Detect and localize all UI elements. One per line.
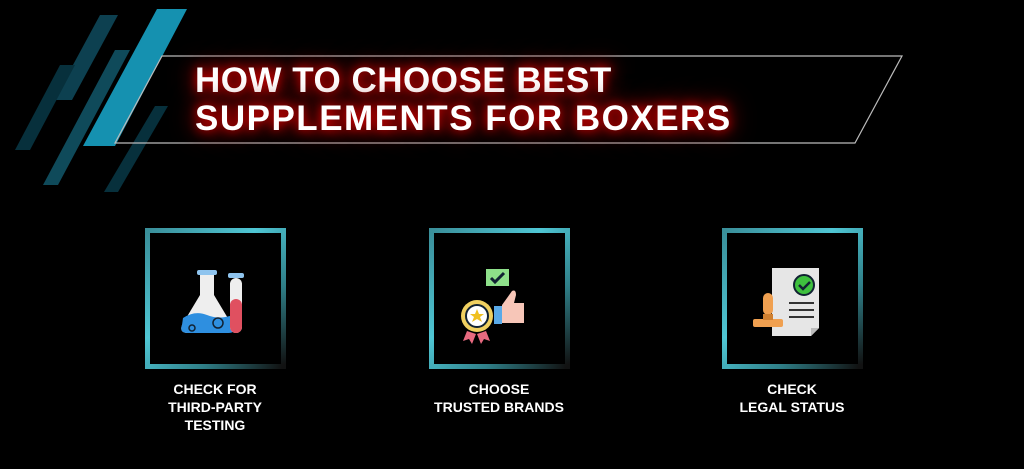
caption: legal status: LEGAL STATUS: [740, 399, 844, 415]
panel: legal status: [722, 228, 863, 369]
caption: third-party: THIRD-PARTY: [168, 399, 262, 415]
decorative stripes: [15, 9, 187, 192]
caption: trusted brands: TRUSTED BRANDS: [434, 399, 564, 415]
panel: third-party testing: [145, 228, 286, 369]
icon: document with stamp: [753, 268, 819, 336]
panel: trusted brands: [429, 228, 570, 369]
caption: third-party: TESTING: [185, 417, 245, 433]
icon: flask and test tube: [181, 270, 244, 333]
title frame: [114, 55, 903, 144]
title: HOW TO CHOOSE BEST: [195, 61, 612, 100]
caption: trusted brands: CHOOSE: [469, 381, 529, 397]
caption: third-party: [168, 381, 262, 433]
caption: legal status: [740, 381, 844, 415]
icon: badge with thumbs up: [461, 269, 524, 344]
caption: trusted brands: [434, 381, 564, 415]
caption: legal status: CHECK: [767, 381, 817, 397]
caption: third-party: CHECK FOR: [173, 381, 257, 397]
title: [180, 50, 744, 147]
title: SUPPLEMENTS FOR BOXERS: [195, 99, 732, 138]
